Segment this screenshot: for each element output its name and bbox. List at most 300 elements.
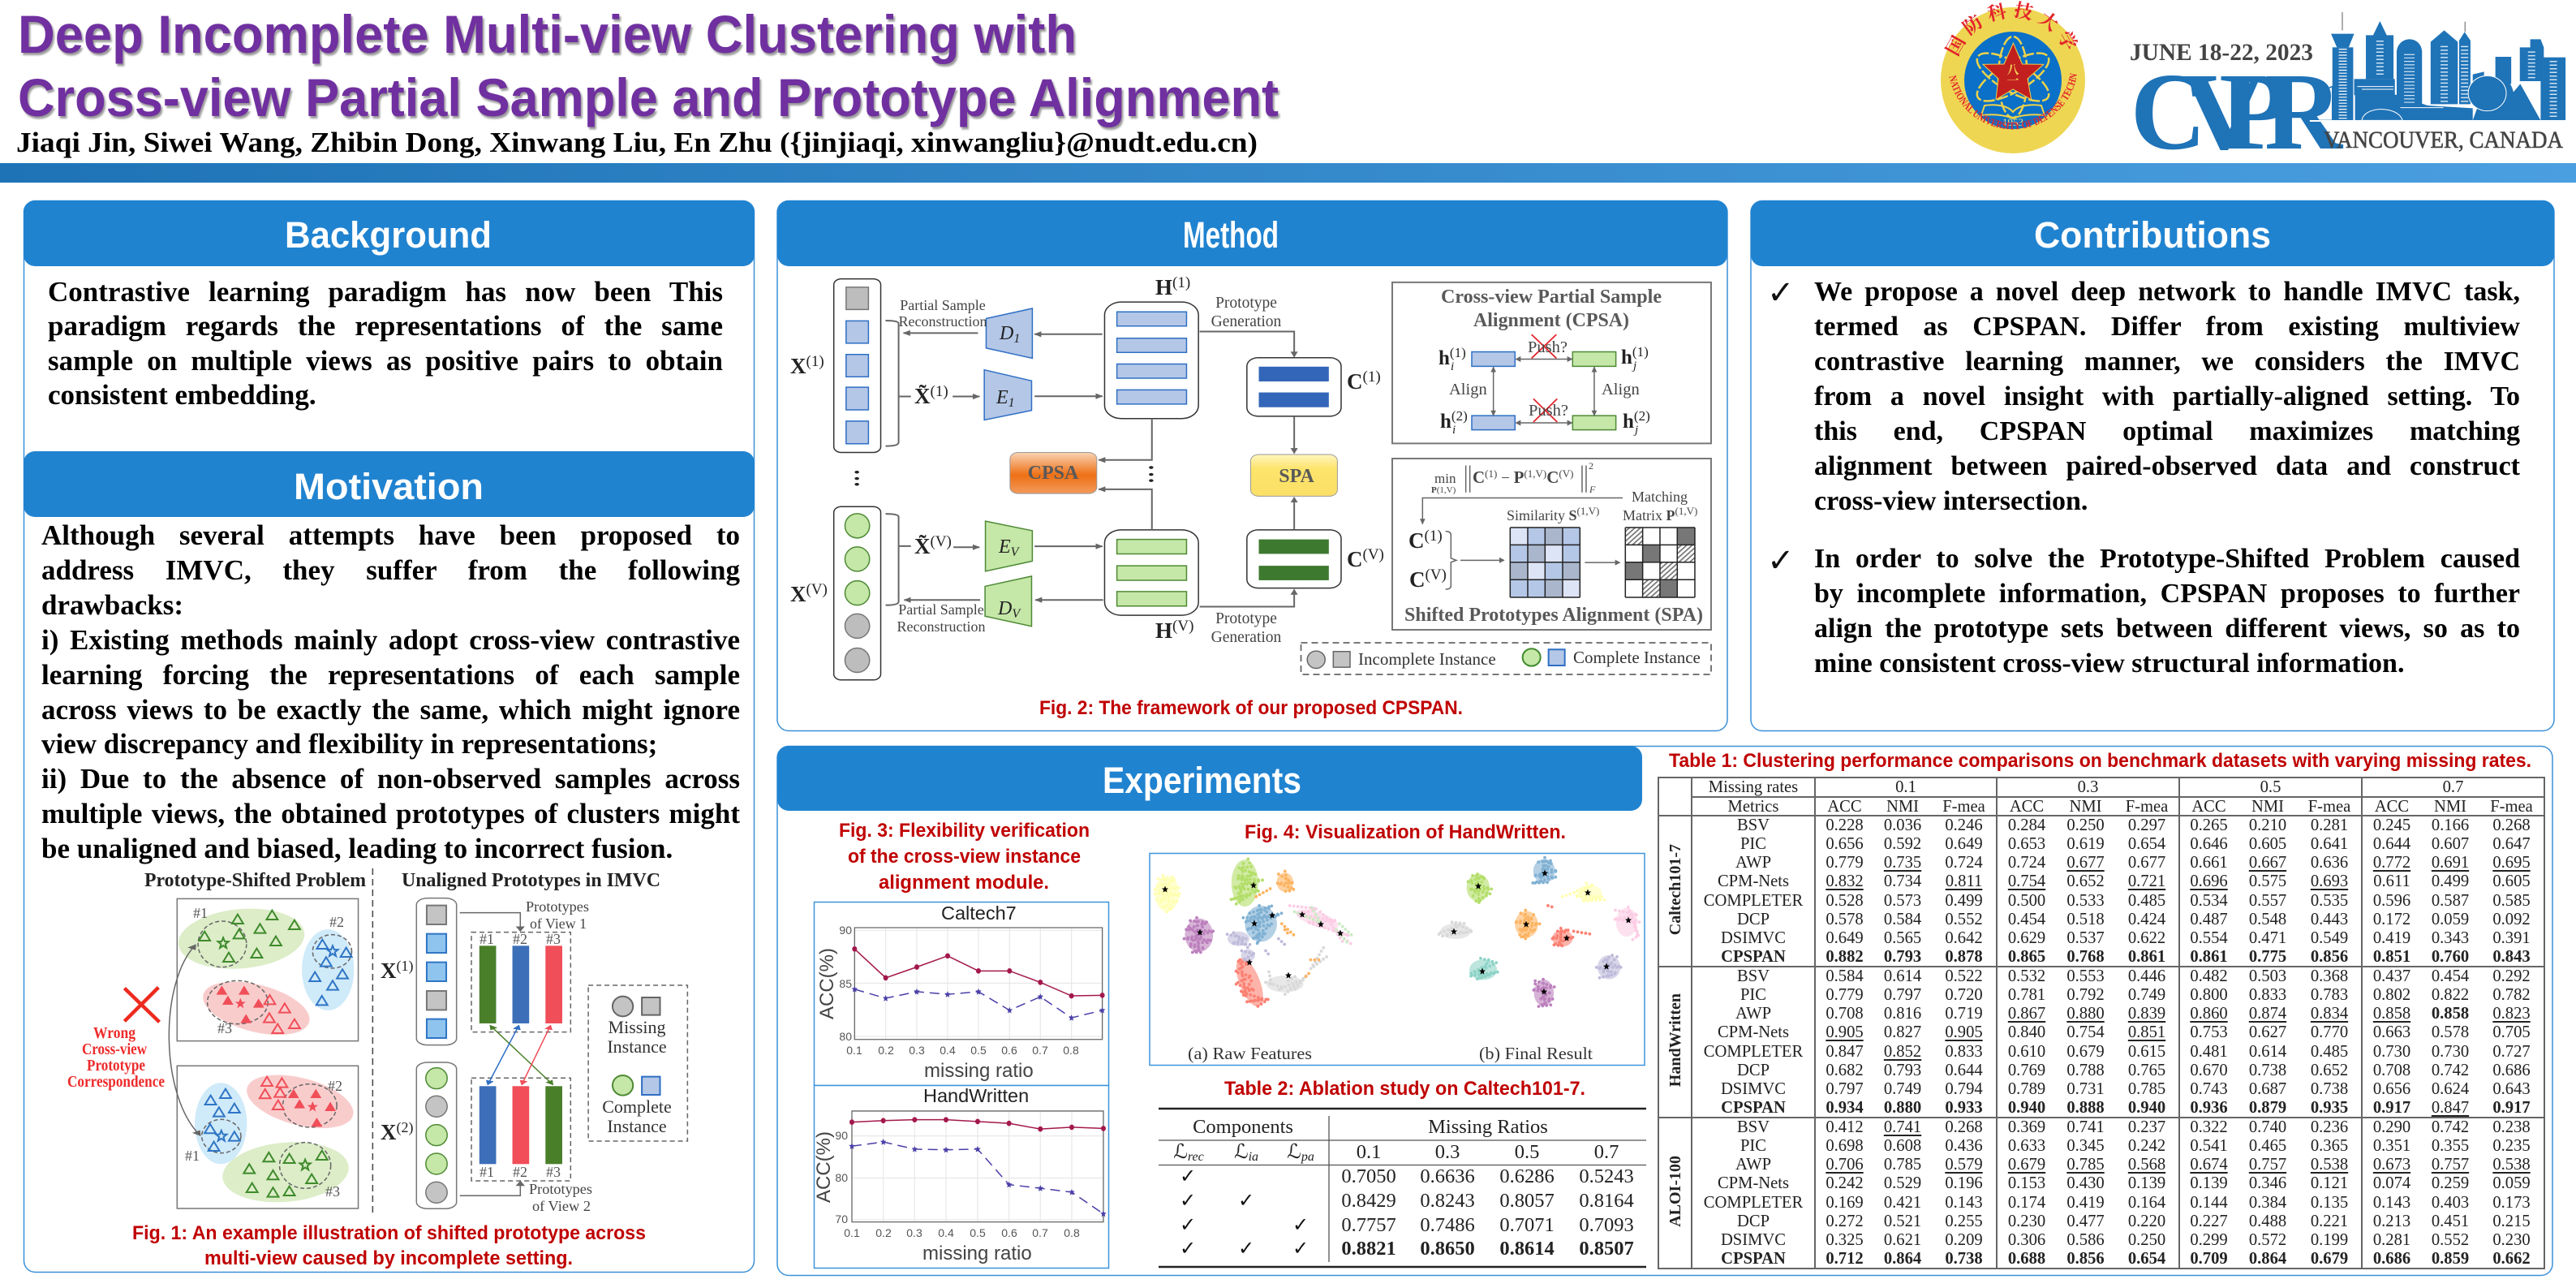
- figure 1: prototype shift illustration: #3: [325, 1183, 340, 1200]
- icon: CVPR conference logo: C: [2131, 51, 2206, 173]
- table 1: clustering performance: 0.477: [2066, 1213, 2105, 1230]
- table 1: clustering performance: 0.794: [1945, 1079, 1983, 1097]
- table 1: clustering performance: 0.653: [2008, 834, 2045, 852]
- table 1: clustering performance: 0.255: [1945, 1213, 1983, 1230]
- table 1: clustering performance: CPM-Nets: [1718, 1023, 1789, 1041]
- table 1: clustering performance: 0.687: [2249, 1079, 2286, 1097]
- heading: experiments: [777, 746, 1642, 811]
- figure 2: CPSPAN framework: Partial Sample: [900, 297, 986, 313]
- table 1: clustering performance: PIC: [1740, 1136, 1766, 1154]
- table 1: clustering performance: 0.246: [1945, 816, 1983, 834]
- figure 2: CPSPAN framework: (1): [1632, 344, 1649, 360]
- table 1: clustering performance: 0.169: [1826, 1193, 1864, 1211]
- header band: [0, 163, 2576, 183]
- table 1: clustering performance: 0.346: [2249, 1174, 2286, 1192]
- figure 2: CPSPAN framework: (V): [1363, 546, 1384, 563]
- text block: motivation: view discrepancy and flexibility in representations;: [41, 728, 657, 760]
- table 1: clustering performance: [1658, 777, 2545, 1269]
- figure 3: flexibility verification charts: missing ratio: [924, 1060, 1034, 1082]
- table 1: clustering performance: 0.538: [2311, 1156, 2348, 1174]
- table 1: clustering performance: DSIMVC: [1721, 1079, 1786, 1097]
- table 2: ablation study: 0.8507: [1579, 1238, 1634, 1260]
- panel: experiments: [777, 746, 2552, 1276]
- table 1: clustering performance: 0.858: [2373, 1005, 2410, 1023]
- table 2: ablation study: 0.5: [1515, 1141, 1539, 1163]
- table 1: clustering performance: 0.852: [1884, 1042, 1921, 1060]
- figure 2: CPSPAN framework: (1): [1172, 274, 1190, 291]
- table 1: clustering performance: 0.802: [2373, 985, 2410, 1003]
- figure 2: CPSPAN framework: (1): [1485, 467, 1497, 480]
- table 1: clustering performance: 0.679: [2066, 1042, 2105, 1060]
- table 1: clustering performance: 0.153: [2008, 1174, 2045, 1192]
- table 1: clustering performance: 0.605: [2249, 834, 2286, 852]
- table 1: clustering performance: 0.781: [2008, 985, 2045, 1003]
- figure 2: CPSPAN framework: Alignment (CPSA): [1473, 310, 1629, 331]
- figure 2: CPSPAN framework: C: [1473, 467, 1485, 487]
- table 1: clustering performance: 0.454: [2432, 967, 2469, 985]
- text block: motivation: Although several attempts have been proposed to: [41, 519, 740, 551]
- table 1: clustering performance: 0.738: [2249, 1062, 2286, 1079]
- table 1: clustering performance: 0.839: [2128, 1005, 2165, 1023]
- table 1: clustering performance: 0.865: [2008, 948, 2045, 966]
- table 1: clustering performance: 0.757: [2249, 1156, 2286, 1174]
- table 1: clustering performance: 0.768: [2066, 948, 2105, 966]
- table 1: clustering performance: DSIMVC: [1721, 928, 1786, 946]
- figure 1: prototype shift illustration: #1: [193, 905, 208, 921]
- table 1: clustering performance: 0.856: [2066, 1250, 2105, 1268]
- table 1: clustering performance: NMI: [2251, 797, 2284, 815]
- table 1: clustering performance: 0.654: [2128, 1250, 2165, 1268]
- table 1: clustering performance: 0.679: [2008, 1156, 2045, 1174]
- table 1: clustering performance: 0.823: [2492, 1005, 2531, 1023]
- figure 1: prototype shift illustration: Cross-view: [82, 1040, 147, 1058]
- text block: contribution 1: from a novel insight with partially-aligned setting. To: [1814, 381, 2520, 411]
- table 1: clustering performance: 0.730: [2373, 1042, 2410, 1060]
- table 1: clustering performance: 0.538: [2492, 1156, 2531, 1174]
- table 1: clustering performance: 0.1: [1895, 778, 1916, 796]
- table 1: clustering performance: DCP: [1737, 1213, 1770, 1230]
- figure 1: prototype shift illustration: X: [381, 958, 397, 983]
- figure 2: CPSPAN framework: Fig. 2: The framework of our proposed CPSPAN.: [1039, 697, 1463, 719]
- figure 2: CPSPAN framework: j: [1632, 360, 1636, 373]
- icon: CVPR conference logo: JUNE 18-22, 2023: [2130, 39, 2313, 66]
- figure 1: prototype shift illustration: #1: [185, 1148, 200, 1164]
- table 1: clustering performance: 0.936: [2190, 1099, 2228, 1117]
- text block: motivation: across views to be exactly the same, which might ignore: [41, 694, 740, 726]
- table 2: ablation study: 0.8243: [1420, 1190, 1475, 1212]
- table 1: clustering performance: 0.299: [2190, 1230, 2228, 1248]
- table 1 caption: Table 1: Clustering performance comparisons on benchmark datasets with varying missing rates.: [1669, 750, 2531, 772]
- table 1: clustering performance: 0.864: [2249, 1250, 2286, 1268]
- table 1: clustering performance: 0.166: [2432, 816, 2469, 834]
- table 1: clustering performance: 0.139: [2190, 1174, 2228, 1192]
- table 1: clustering performance: 0.682: [1826, 1062, 1864, 1079]
- figure 3: flexibility verification charts: 0.7: [1032, 1044, 1048, 1057]
- table 2: ablation study: Table 2: Ablation study on Caltech101-7.: [1224, 1078, 1585, 1100]
- table 1: clustering performance: 0.667: [2249, 854, 2286, 872]
- table 1: clustering performance: 0.532: [2008, 967, 2045, 985]
- figure 3: flexibility verification charts: 0.1: [846, 1044, 862, 1057]
- table 2: ablation study: 0.8429: [1341, 1190, 1396, 1212]
- figure 2: CPSPAN framework: Push?: [1528, 338, 1568, 356]
- table 1: clustering performance: 0.608: [1884, 1136, 1921, 1154]
- table 1: clustering performance: F-mea: [2490, 797, 2533, 815]
- figure 3: flexibility verification charts: 0.5: [970, 1226, 986, 1239]
- heading: experiments: Experiments: [1103, 760, 1301, 801]
- table 1: clustering performance: 0.706: [1826, 1156, 1864, 1174]
- table 1: clustering performance: 0.882: [1826, 948, 1864, 966]
- table 1: clustering performance: 0.785: [2128, 1079, 2165, 1097]
- table 1: clustering performance: 0.673: [2373, 1156, 2410, 1174]
- table 1: clustering performance: 0.454: [2008, 911, 2045, 928]
- figure 2: CPSPAN framework: (V): [1559, 467, 1573, 480]
- table 1: clustering performance: 0.552: [2432, 1230, 2469, 1248]
- figure 1: prototype shift illustration: #2: [513, 1164, 527, 1180]
- table 1: clustering performance: 0.199: [2311, 1230, 2348, 1248]
- table 1: clustering performance: 0.584: [1884, 911, 1921, 928]
- table 1: clustering performance: 0.143: [1945, 1193, 1983, 1211]
- figure 2: CPSPAN framework: P(1,V): [1431, 485, 1456, 495]
- table 1: clustering performance: 0.847: [2432, 1099, 2469, 1117]
- figure 3: flexibility verification charts: 0.6: [1001, 1044, 1017, 1057]
- table 1: clustering performance: 0.343: [2432, 928, 2469, 946]
- table 1: clustering performance: 0.741: [2066, 1118, 2105, 1136]
- table 1: clustering performance: 0.788: [2066, 1062, 2105, 1079]
- table 1: clustering performance: 0.579: [1945, 1156, 1983, 1174]
- table 2: ablation study: 0.7071: [1499, 1214, 1555, 1236]
- table 1: clustering performance: 0.059: [2432, 911, 2469, 928]
- table 2: ablation study: ℒ: [1234, 1141, 1249, 1163]
- table 2: ablation study: 0.7486: [1420, 1214, 1475, 1236]
- table 1: clustering performance: 0.719: [1945, 1005, 1983, 1023]
- table 1: clustering performance: 0.940: [2128, 1099, 2165, 1117]
- figure 3: flexibility verification charts: 80: [835, 1171, 848, 1184]
- table 1: clustering performance: 0.652: [2311, 1062, 2348, 1079]
- table 2: ablation study: ✓: [1180, 1238, 1196, 1260]
- table 1: clustering performance: 0.485: [2311, 1042, 2348, 1060]
- table 1: clustering performance: 0.578: [2432, 1023, 2469, 1041]
- figure 1: prototype shift illustration: #2: [328, 1078, 342, 1094]
- figure 2: CPSPAN framework: X: [790, 354, 806, 378]
- figure 2: CPSPAN framework: (1): [1450, 345, 1466, 360]
- table 1: clustering performance: 0.575: [2249, 872, 2286, 890]
- table 1: clustering performance: 0.691: [2432, 854, 2469, 872]
- authors: Jiaqi Jin, Siwei Wang, Zhibin Dong, Xinwang Liu, En Zhu ({jinjiaqi, xinwangliu}@nudt.edu.cn): [16, 127, 1258, 158]
- figure 3: flexibility verification charts: Fig. 3: Flexibility verification: [839, 820, 1090, 842]
- figure 2: CPSPAN framework: Prototype: [1215, 610, 1277, 627]
- table 1: clustering performance: 0.174: [2008, 1193, 2045, 1211]
- figure 1: prototype shift illustration: Prototype-Shifted Problem: [144, 870, 366, 891]
- table 1: clustering performance: CPSPAN: [1721, 1250, 1786, 1268]
- panel: background and motivation: [24, 200, 755, 1273]
- table 2: ablation study: ✓: [1292, 1238, 1309, 1260]
- table 1: clustering performance: AWP: [1735, 854, 1771, 872]
- table 1: clustering performance: 0.220: [2128, 1213, 2165, 1230]
- table 2: ablation study: ✓: [1238, 1191, 1254, 1212]
- table 1: clustering performance: 0.518: [2066, 911, 2105, 928]
- table 1: clustering performance: 0.237: [2128, 1118, 2165, 1136]
- text block: motivation: [41, 519, 740, 864]
- figure 3: flexibility verification charts: 0.2: [878, 1044, 894, 1057]
- table 1: clustering performance: 0.173: [2492, 1193, 2531, 1211]
- table 1: clustering performance: 0.709: [2190, 1250, 2228, 1268]
- figure 2: CPSPAN framework: Align: [1449, 381, 1487, 398]
- figure 2: CPSPAN framework: F: [1589, 484, 1596, 495]
- table 1: clustering performance: 0.481: [2190, 1042, 2228, 1060]
- table 1: clustering performance: COMPLETER: [1704, 1042, 1803, 1060]
- table 1: clustering performance: 0.592: [1884, 834, 1921, 852]
- table 1: clustering performance: 0.144: [2190, 1193, 2228, 1211]
- table 1: clustering performance: 0.670: [2190, 1062, 2228, 1079]
- table 2: ablation study: 0.7050: [1341, 1165, 1396, 1187]
- table 1: clustering performance: 0.092: [2492, 911, 2531, 928]
- table 1: clustering performance: 0.816: [1884, 1005, 1921, 1023]
- table 1: clustering performance: 0.242: [2128, 1136, 2165, 1154]
- table 1: clustering performance: 0.642: [1945, 928, 1983, 946]
- figure 2: CPSPAN framework: (1): [806, 353, 824, 370]
- table 1: clustering performance: 0.789: [2008, 1079, 2045, 1097]
- text block: background: paradigm regards the representations of the same: [48, 310, 723, 342]
- table 1: clustering performance: 0.757: [2432, 1156, 2469, 1174]
- figure 1: prototype shift illustration: Wrong: [93, 1024, 135, 1042]
- table 1: clustering performance: 0.3: [2078, 778, 2098, 796]
- table 1: clustering performance: 0.235: [2492, 1136, 2531, 1154]
- table 1: clustering performance: 0.859: [2432, 1250, 2469, 1268]
- table 1: clustering performance: 0.365: [2311, 1136, 2348, 1154]
- table 1: clustering performance: 0.730: [2432, 1042, 2469, 1060]
- table 1: clustering performance: 0.443: [2311, 911, 2348, 928]
- table 1: clustering performance: 0.471: [2249, 928, 2286, 946]
- table 1: clustering performance: 0.355: [2432, 1136, 2469, 1154]
- table 1: clustering performance: 0.322: [2190, 1118, 2228, 1136]
- table 1: clustering performance: 0.325: [1826, 1230, 1864, 1248]
- table 1: clustering performance: 0.851: [2373, 948, 2410, 966]
- figure 2: CPSPAN framework: Prototype: [1215, 295, 1277, 312]
- table 1: clustering performance: 0.369: [2008, 1118, 2045, 1136]
- table 1: clustering performance: 0.727: [2492, 1042, 2531, 1060]
- table 1: clustering performance: 0.636: [2311, 854, 2348, 872]
- table 1: clustering performance: 0.587: [2432, 891, 2469, 909]
- table 1: clustering performance: 0.196: [1945, 1174, 1983, 1192]
- table 1: clustering performance: 0.629: [2008, 928, 2045, 946]
- table 2: ablation study: ℒ: [1287, 1141, 1301, 1163]
- table 1: clustering performance: 0.534: [2190, 891, 2228, 909]
- figure 1: prototype shift illustration: #2: [513, 931, 527, 947]
- figure 3: flexibility verification charts: 80: [839, 1030, 852, 1043]
- table 1: clustering performance: 0.712: [1826, 1250, 1864, 1268]
- table 1: clustering performance: 0.661: [2190, 854, 2228, 872]
- table 1: clustering performance: 0.741: [1884, 1118, 1921, 1136]
- table 1: clustering performance: 0.209: [1945, 1230, 1983, 1248]
- text block: motivation: drawbacks:: [41, 589, 183, 621]
- figure 4: HandWritten visualization: Fig. 4: Visualization of HandWritten.: [1245, 821, 1566, 843]
- figure 1: prototype shift illustration: #3: [546, 931, 561, 947]
- table 1: clustering performance: 0.535: [2311, 891, 2348, 909]
- table 1: clustering performance: 0.230: [2008, 1213, 2045, 1230]
- figure 1: prototype shift illustration: Instance: [607, 1116, 667, 1136]
- table 1: clustering performance: 0.705: [2492, 1023, 2531, 1041]
- table 1: clustering performance: 0.121: [2311, 1174, 2348, 1192]
- table 1: clustering performance: 0.905: [1826, 1023, 1864, 1041]
- title: [18, 4, 1279, 127]
- table 2: ablation study: 0.7093: [1579, 1214, 1634, 1236]
- figure 2: CPSPAN framework: Push?: [1529, 402, 1568, 420]
- table 1: clustering performance: 0.643: [2492, 1079, 2531, 1097]
- table 1: clustering performance: 0.272: [1826, 1213, 1864, 1230]
- table 1: clustering performance: 0.934: [1826, 1099, 1864, 1117]
- table 1: clustering performance: 0.465: [2249, 1136, 2286, 1154]
- table 1: clustering performance: 0.674: [2190, 1156, 2228, 1174]
- table 1: clustering performance: 0.345: [2066, 1136, 2105, 1154]
- table 2: ablation study: ℒ: [1173, 1141, 1188, 1163]
- figure 2: CPSPAN framework: h: [1621, 347, 1632, 368]
- table 1: clustering performance: 0.822: [2432, 985, 2469, 1003]
- table 1: clustering performance: 0.549: [2311, 928, 2348, 946]
- table 1: clustering performance: 0.708: [1826, 1005, 1864, 1023]
- figure 4: HandWritten visualization: [1150, 821, 1645, 1065]
- table 1: clustering performance: 0.605: [2492, 872, 2531, 890]
- heading: motivation: Motivation: [294, 466, 484, 507]
- table 1: clustering performance: 0.553: [2066, 967, 2105, 985]
- table 2: ablation study: ✓: [1238, 1238, 1254, 1260]
- table 2: ablation study: 0.8057: [1499, 1190, 1555, 1212]
- table 1: clustering performance: 0.696: [2190, 872, 2228, 890]
- table 1: clustering performance: ACC: [2191, 797, 2226, 815]
- table 1: clustering performance: 0.250: [2128, 1230, 2165, 1248]
- table 1: clustering performance: 0.797: [1826, 1079, 1864, 1097]
- table 1: clustering performance: AWP: [1735, 1005, 1771, 1023]
- table 1: clustering performance: 0.772: [2373, 854, 2410, 872]
- table 1: clustering performance: 0.242: [1826, 1174, 1864, 1192]
- figure 3: flexibility verification charts: 0.7: [1032, 1226, 1048, 1239]
- table 1: clustering performance: 0.488: [2249, 1213, 2286, 1230]
- table 1: clustering performance: 0.578: [1826, 911, 1864, 928]
- figure 2: CPSPAN framework: V: [1012, 607, 1021, 621]
- table 1: clustering performance: 0.779: [1826, 854, 1864, 872]
- table 1: clustering performance: 0.430: [2066, 1174, 2105, 1192]
- table 1: clustering performance: 0.769: [2008, 1062, 2045, 1079]
- table 1: clustering performance: 0.647: [2492, 834, 2531, 852]
- figure 3: flexibility verification charts: 0.6: [1001, 1226, 1017, 1239]
- figure 2: CPSPAN framework: Partial Sample: [898, 601, 984, 618]
- table 1: clustering performance: 0.572: [2249, 1230, 2286, 1248]
- table 1: clustering performance: 0.792: [2066, 985, 2105, 1003]
- table 1: clustering performance: 0.811: [1946, 872, 1982, 890]
- figure 2: CPSPAN framework: X: [790, 582, 806, 606]
- table 1: clustering performance: 0.548: [2249, 911, 2286, 928]
- table 1: clustering performance: 0.843: [2492, 948, 2531, 966]
- table 1: clustering performance: 0.281: [2373, 1230, 2410, 1248]
- heading: contributions: Contributions: [2034, 214, 2271, 256]
- table 1: clustering performance: 0.528: [1826, 891, 1864, 909]
- table 1: clustering performance: 0.721: [2128, 872, 2165, 890]
- table 1: clustering performance: 0.210: [2249, 816, 2286, 834]
- text block: contribution 2: In order to solve the Prototype-Shifted Problem caused: [1814, 544, 2520, 574]
- table 1: clustering performance: F-mea: [2308, 797, 2350, 815]
- figure 3: flexibility verification charts: HandWritten: [923, 1085, 1029, 1106]
- table 1: clustering performance: 0.880: [2066, 1005, 2105, 1023]
- figure 1: prototype shift illustration: of View 2: [532, 1198, 591, 1214]
- table 1: clustering performance: 0.624: [2432, 1079, 2469, 1097]
- table 1: clustering performance: 0.306: [2008, 1230, 2045, 1248]
- figure 2: CPSPAN framework: H: [1155, 618, 1172, 643]
- table 1: clustering performance: 0.770: [2311, 1023, 2348, 1041]
- figure 2: CPSPAN framework: D: [1000, 323, 1013, 344]
- text block: contribution 1: cross-view intersection.: [1814, 486, 2088, 516]
- figure 2: CPSPAN framework: i: [1451, 360, 1454, 373]
- text block: background: [48, 276, 723, 411]
- figure 2: CPSPAN framework: Incomplete Instance: [1358, 649, 1496, 669]
- table 1: clustering performance: 0.724: [1945, 854, 1983, 872]
- figure 2: CPSPAN framework: Shifted Prototypes Alignment (SPA): [1404, 605, 1703, 626]
- table 1: clustering performance: 0.541: [2190, 1136, 2228, 1154]
- table 1: clustering performance: 0.688: [2008, 1250, 2045, 1268]
- table 1: clustering performance: 0.529: [1884, 1174, 1921, 1192]
- text block: contribution 2: by incomplete information, CPSPAN proposes to further: [1814, 579, 2520, 609]
- table 1: clustering performance: 0.793: [1884, 948, 1921, 966]
- figure 2: CPSPAN framework: (1,V): [1524, 467, 1546, 480]
- table 1: clustering performance: 0.754: [2066, 1023, 2105, 1041]
- table 1: clustering performance: 0.742: [2432, 1118, 2469, 1136]
- table 1: clustering performance: NMI: [2434, 797, 2466, 815]
- figure 1: prototype shift illustration: Missing: [609, 1017, 665, 1037]
- table 2: ablation study: 0.1: [1357, 1141, 1381, 1163]
- figure 2: CPSPAN framework: (V): [930, 533, 952, 550]
- figure 3: flexibility verification charts: 0.3: [906, 1226, 922, 1239]
- table 1: clustering performance: 0.213: [2373, 1213, 2410, 1230]
- table 1: clustering performance: 0.403: [2432, 1193, 2469, 1211]
- figure 2: CPSPAN framework: (2): [1634, 408, 1650, 424]
- table 1: clustering performance: Metrics: [1728, 797, 1778, 815]
- figure 2: CPSPAN framework: C: [1408, 528, 1425, 553]
- table 1: clustering performance: 0.164: [2128, 1193, 2165, 1211]
- figure 2: CPSPAN framework: (V): [806, 581, 828, 598]
- table 1: clustering performance: BSV: [1737, 1118, 1770, 1136]
- figure 3: flexibility verification charts: 0.3: [909, 1044, 925, 1057]
- figure 2: CPSPAN framework: Align: [1602, 381, 1640, 398]
- table 1: clustering performance: 0.644: [2373, 834, 2410, 852]
- table 1: clustering performance: 0.584: [1826, 967, 1864, 985]
- table 1: clustering performance: 0.297: [2128, 816, 2165, 834]
- table 1: clustering performance: 0.847: [1826, 1042, 1864, 1060]
- table 1: clustering performance: 0.621: [1884, 1230, 1921, 1248]
- table 1: clustering performance: 0.485: [2128, 891, 2165, 909]
- table 1: clustering performance: 0.585: [2492, 891, 2531, 909]
- table 1: clustering performance: 0.5: [2260, 778, 2281, 796]
- table 1: clustering performance: DSIMVC: [1721, 1230, 1786, 1248]
- figure 2: CPSPAN framework: C: [1347, 369, 1363, 394]
- table 1: clustering performance: 0.284: [2008, 816, 2045, 834]
- icon: CVPR conference logo: V: [2181, 51, 2267, 173]
- table 1: clustering performance: 0.245: [2373, 816, 2410, 834]
- table 1: clustering performance: NMI: [1886, 797, 1919, 815]
- table 1: clustering performance: 0.573: [1884, 891, 1921, 909]
- title: Cross-view Partial Sample and Prototype Alignment: [18, 67, 1279, 127]
- figure 2: CPSPAN framework: E: [996, 387, 1008, 408]
- figure 1: prototype shift illustration: Prototype: [87, 1057, 145, 1075]
- figure 2: CPSPAN framework: (1): [1363, 368, 1381, 386]
- figure 3: flexibility verification charts: of the cross-view instance: [848, 846, 1081, 868]
- table 1: clustering performance: 0.649: [1945, 834, 1983, 852]
- table 1: clustering performance: 0.614: [1884, 967, 1921, 985]
- figure 3: flexibility verification charts: 0.4: [938, 1226, 954, 1239]
- table 1: clustering performance: Missing rates: [1709, 778, 1798, 796]
- table 1: clustering performance: 0.627: [2249, 1023, 2286, 1041]
- table 1: clustering performance: 0.482: [2190, 967, 2228, 985]
- table 1: clustering performance: ACC: [2010, 797, 2044, 815]
- table 1: clustering performance: 0.250: [2066, 816, 2105, 834]
- table 1: clustering performance: 0.238: [2492, 1118, 2531, 1136]
